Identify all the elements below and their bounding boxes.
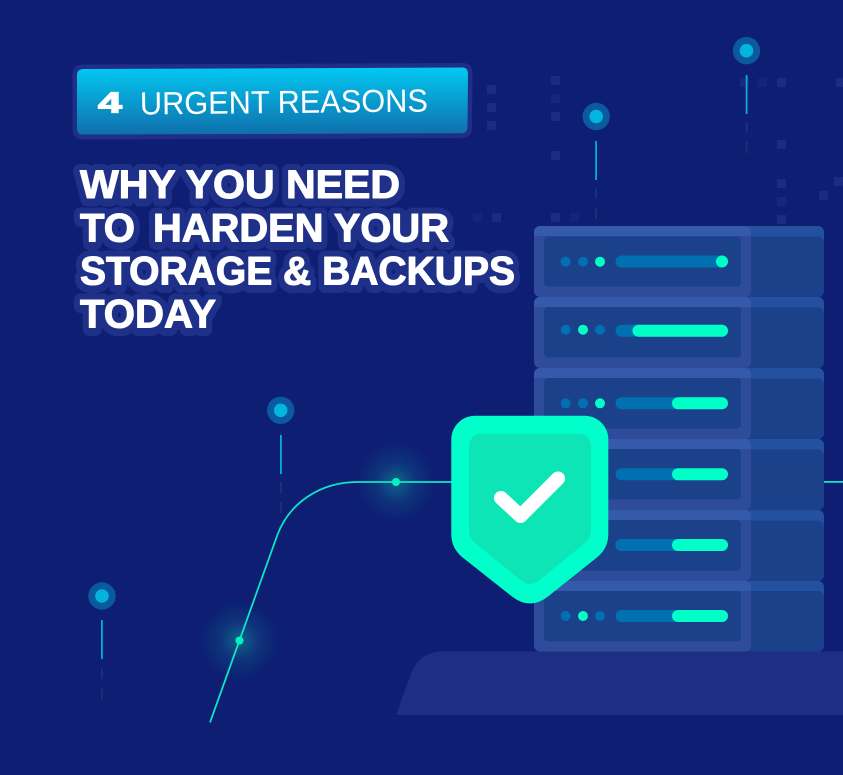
title: STORAGE & BACKUPS <box>80 250 515 294</box>
title: TO <box>80 206 135 250</box>
title: TO <box>80 208 135 252</box>
pin: top middle <box>582 103 610 219</box>
badge text: URGENT REASONS <box>140 82 428 121</box>
title: TODAY <box>80 294 216 338</box>
title: HARDEN YOUR <box>153 206 449 250</box>
title: STORAGE & BACKUPS <box>80 250 515 294</box>
title: WHY YOU NEED <box>80 163 400 207</box>
connector line with glowing nodes <box>200 442 843 722</box>
title: WHY YOU NEED <box>80 165 400 209</box>
title: TO <box>80 206 135 250</box>
pin: centre left <box>267 397 294 513</box>
server rack <box>534 226 824 652</box>
server row 5 <box>534 510 824 581</box>
title: TODAY <box>80 292 216 336</box>
server row 4 <box>534 439 824 510</box>
title: HARDEN YOUR <box>153 206 449 250</box>
server row 3 <box>534 368 824 439</box>
title: STORAGE & BACKUPS <box>80 252 515 296</box>
title: TODAY <box>80 292 216 336</box>
server base platform <box>396 652 843 715</box>
title: WHY YOU NEED <box>80 163 400 207</box>
pin: bottom left <box>88 582 116 699</box>
server row 6 <box>534 581 824 652</box>
badge number: 4 <box>98 88 122 120</box>
title <box>80 163 515 338</box>
server row 1 <box>534 226 824 297</box>
title: HARDEN YOUR <box>153 208 449 252</box>
shield icon with check mark <box>451 416 608 604</box>
server row 2 <box>534 297 824 368</box>
badge: 4 urgent reasons <box>72 63 472 140</box>
pin: top right <box>733 37 760 153</box>
